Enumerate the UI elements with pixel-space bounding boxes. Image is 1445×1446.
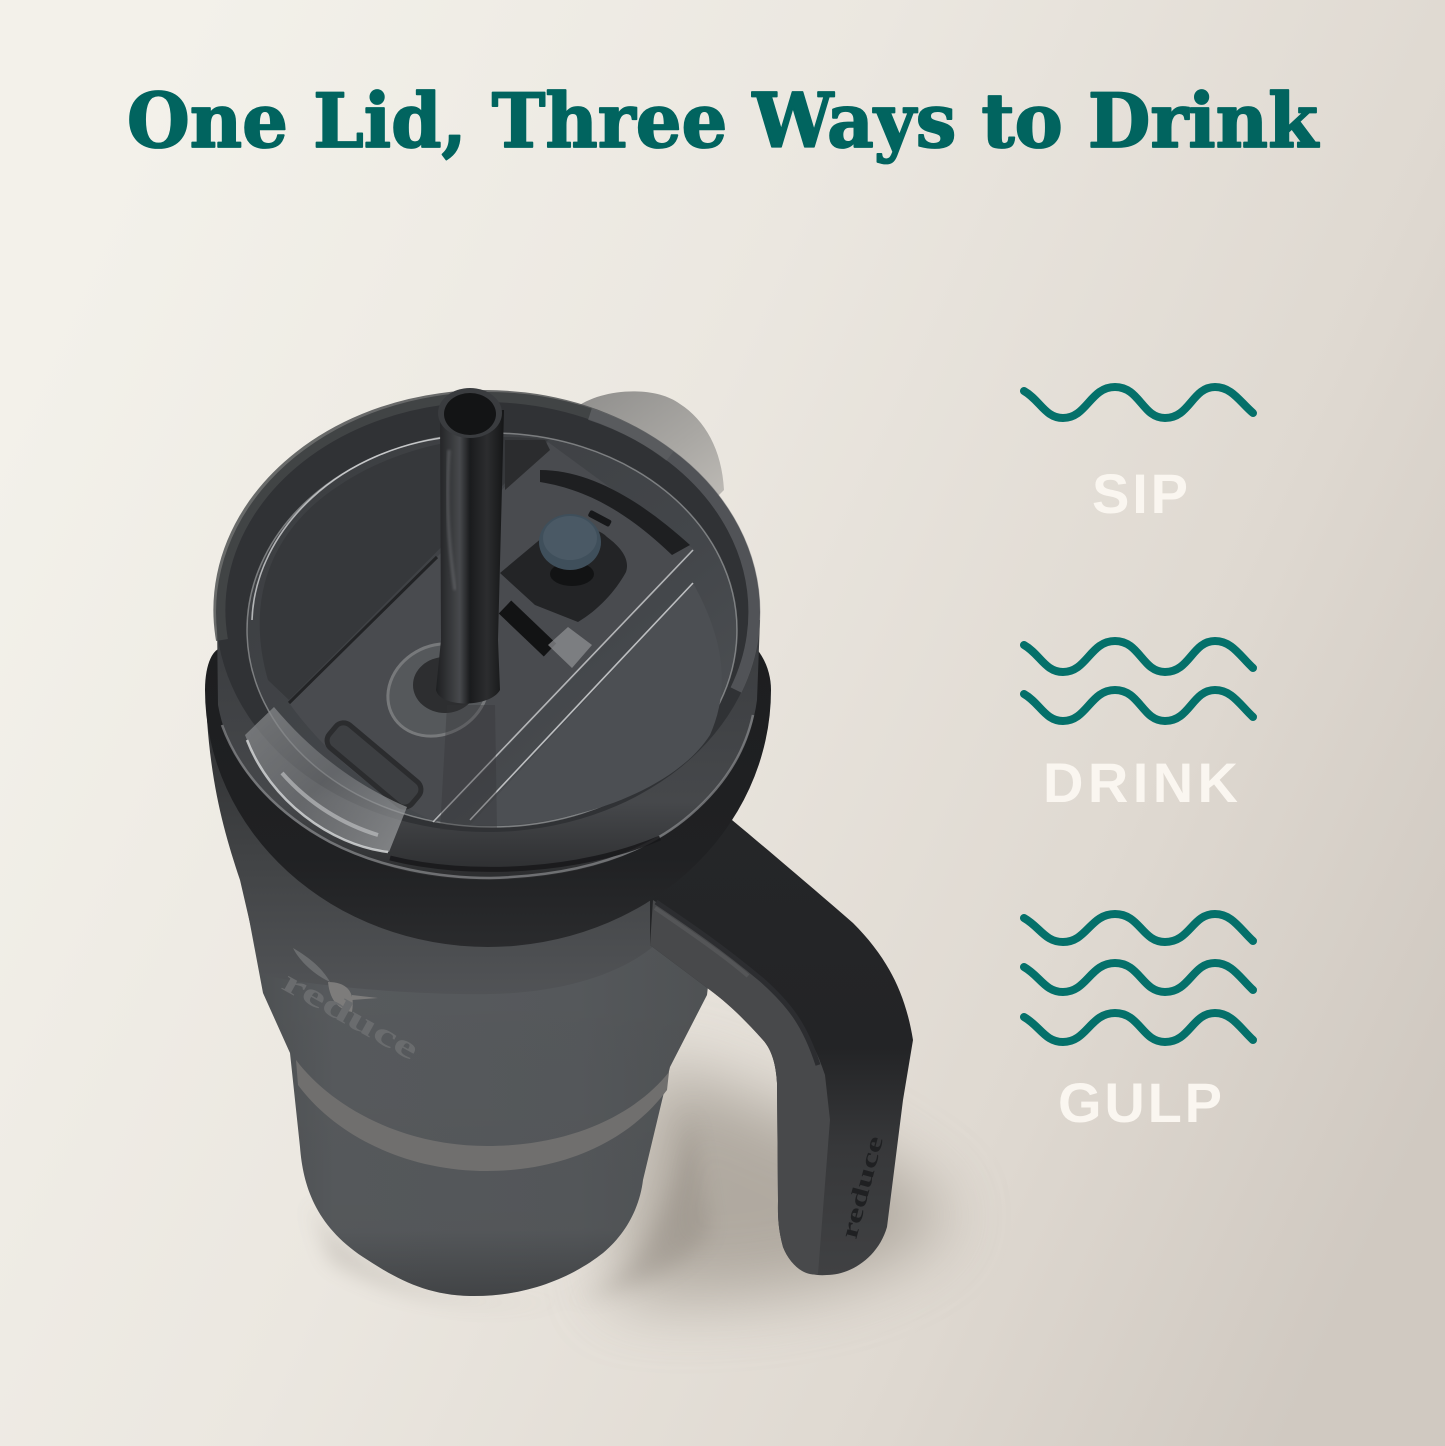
legend: drink xyxy=(1024,641,1253,814)
lid xyxy=(216,388,760,880)
tumbler xyxy=(205,388,913,1296)
label: drink: DRINK xyxy=(1043,751,1238,814)
handle logo: reduce xyxy=(837,1133,889,1242)
label: gulp: GULP xyxy=(1058,1071,1222,1134)
legend: sip xyxy=(1024,387,1253,525)
waves: drink xyxy=(1024,641,1253,721)
center channel xyxy=(289,442,695,822)
waves: gulp xyxy=(1024,914,1253,1042)
slider xyxy=(548,627,592,668)
straw shadow channel xyxy=(440,705,497,830)
body logo xyxy=(277,948,425,1067)
lid rim xyxy=(216,392,760,832)
title: One Lid, Three Ways to Drink xyxy=(127,77,1320,165)
lid pull tab xyxy=(574,391,724,498)
button well xyxy=(500,525,627,622)
legend: gulp xyxy=(1024,914,1253,1134)
lower right panel xyxy=(470,583,722,825)
top bridge of lid xyxy=(505,440,550,490)
drink slot xyxy=(323,719,425,811)
tumbler floor shadow xyxy=(310,1060,950,1304)
straw xyxy=(436,388,504,704)
lid wall xyxy=(217,620,760,880)
front flap xyxy=(245,707,407,852)
stripe band xyxy=(296,1060,669,1171)
vent button xyxy=(539,510,612,586)
collar skirt xyxy=(207,720,655,994)
tumbler body xyxy=(238,860,722,1296)
collar xyxy=(205,648,771,947)
lid well xyxy=(247,433,737,827)
wave: sip xyxy=(1024,387,1253,418)
handle xyxy=(650,820,913,1275)
label: sip: SIP xyxy=(1092,462,1188,525)
handle inner side face xyxy=(650,900,830,1274)
straw hole recess xyxy=(371,626,505,754)
body logo: reduce xyxy=(277,963,425,1067)
left recessed panel xyxy=(260,437,548,700)
